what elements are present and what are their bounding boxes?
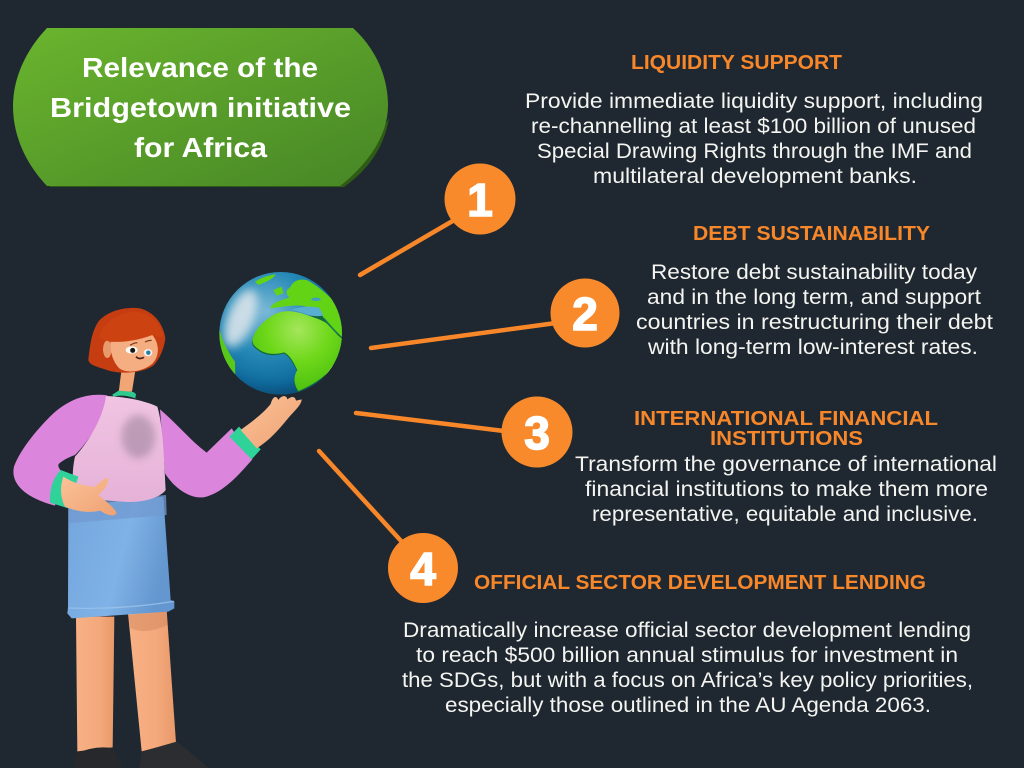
number badge 3 [502, 396, 572, 468]
body text: Transform the governance of international [575, 453, 997, 476]
africa [252, 311, 343, 391]
title banner [13, 28, 389, 187]
connector arrows [319, 219, 556, 542]
number badge 4: 4 [410, 543, 436, 595]
heading: OFFICIAL SECTOR DEVELOPMENT LENDING [474, 572, 926, 594]
collar [112, 391, 136, 398]
right hand [241, 396, 302, 448]
number badge 2: 2 [572, 288, 598, 340]
number badge 2 [550, 278, 620, 348]
title text: for Africa [134, 132, 267, 163]
heading: LIQUIDITY SUPPORT [631, 52, 842, 74]
body text: the SDGs, but with a focus on Africa’s key policy priorities, [402, 669, 973, 692]
left cuff [50, 470, 78, 508]
eye left [126, 346, 138, 354]
illustration: woman hands and cuffs [50, 396, 302, 515]
body text: Restore debt sustainability today [651, 261, 978, 284]
eye right [144, 349, 152, 356]
number badge 1: 1 [467, 174, 493, 226]
right arm sleeve [160, 409, 252, 497]
heading: INTERNATIONAL FINANCIAL [634, 408, 938, 430]
body text: to reach $500 billion annual stimulus for investment in [416, 644, 958, 667]
left hand [61, 477, 117, 515]
body text: countries in restructuring their debt [636, 311, 993, 334]
section 1: liquidity support [525, 52, 983, 188]
number badge 4 [388, 533, 458, 603]
brows [130, 340, 152, 345]
globe highlight [217, 285, 265, 352]
number badge 1 [444, 164, 516, 234]
banner shadow [40, 118, 389, 187]
greenland [255, 274, 276, 285]
body text: financial institutions to make them more [585, 478, 988, 501]
left arm sleeve [13, 395, 107, 506]
body text [402, 619, 973, 717]
left leg [76, 617, 114, 751]
scandinavia [273, 287, 283, 296]
illustration: globe [217, 272, 347, 398]
africa shadow [252, 313, 346, 392]
body text: representative, equitable and inclusive. [592, 503, 978, 526]
pupil right [146, 350, 150, 355]
illustration: woman head [88, 308, 165, 398]
heading [634, 408, 938, 450]
red sea [323, 318, 338, 335]
number badge 3: 3 [524, 407, 550, 459]
body text: Dramatically increase official sector development lending [403, 619, 971, 642]
neck [119, 368, 136, 392]
skirt [67, 497, 174, 618]
face [111, 335, 158, 371]
body text: especially those outlined in the AU Agenda 2063. [445, 694, 931, 717]
body text [575, 453, 997, 526]
right cuff [229, 427, 261, 459]
mouth [136, 357, 144, 359]
heading: DEBT SUSTAINABILITY [693, 223, 931, 245]
black sea [311, 298, 321, 301]
section 3: international financial institutions [575, 408, 997, 526]
illustration: woman lower body [67, 497, 210, 768]
madagascar [325, 362, 335, 376]
lower shade [241, 380, 266, 390]
body text: multilateral development banks. [593, 165, 917, 188]
body text [525, 90, 983, 188]
skirt hem [69, 601, 174, 608]
body text [636, 261, 993, 359]
leg shadow under skirt [128, 612, 167, 631]
banner shape [13, 28, 388, 186]
body text: re-channelling at least $100 billion of unused [531, 115, 976, 138]
body text: and in the long term, and support [647, 286, 981, 309]
waistband [68, 495, 167, 523]
body text: Provide immediate liquidity support, including [525, 90, 983, 113]
heading: INSTITUTIONS [710, 428, 863, 450]
title text [50, 52, 351, 163]
illustration: woman upper body [13, 395, 252, 523]
hair fringe [99, 312, 163, 342]
left shoe [82, 747, 110, 751]
torso shading [122, 415, 155, 458]
section 2: debt sustainability [636, 223, 993, 359]
title text: Relevance of the [82, 52, 318, 83]
section 4: official sector development lending [402, 572, 973, 717]
title text: Bridgetown initiative [50, 92, 351, 123]
torso [73, 396, 166, 502]
mediterranean [292, 307, 323, 316]
pupil left [130, 348, 135, 353]
body text: Special Drawing Rights through the IMF and [537, 140, 972, 163]
right shoe [139, 742, 210, 768]
hair back [88, 308, 165, 373]
right leg [128, 610, 176, 751]
ear [103, 341, 112, 358]
europe [270, 280, 342, 337]
body text: with long-term low-interest rates. [647, 336, 978, 359]
south america edge [219, 328, 235, 377]
